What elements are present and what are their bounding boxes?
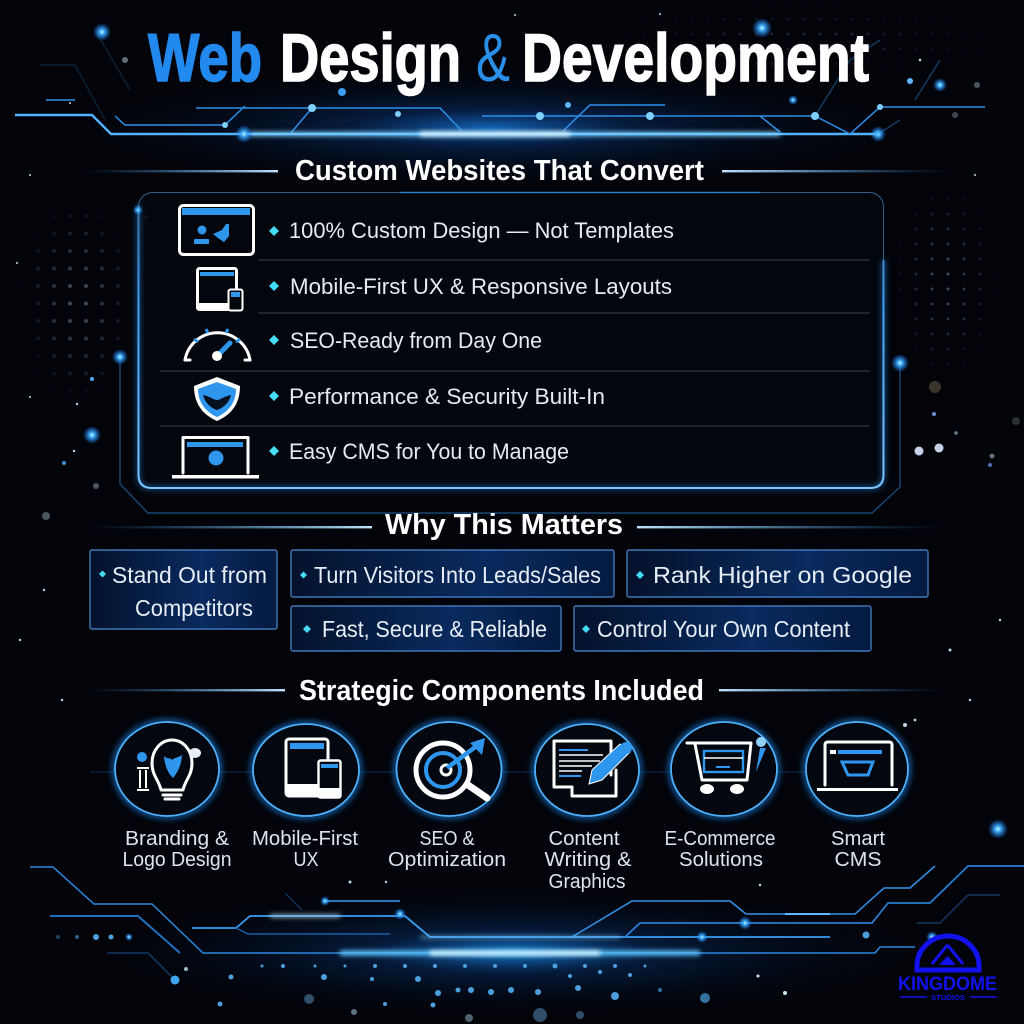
benefit: ranking	[627, 550, 928, 597]
icon: browser window	[180, 206, 254, 254]
title: &	[476, 20, 510, 96]
component: mobile first: Mobile-First	[252, 828, 358, 850]
heading: why this matters: Why This Matters	[385, 509, 623, 541]
component: e-commerce: Solutions	[679, 849, 763, 871]
icon: speed gauge	[185, 329, 250, 361]
feature list	[269, 218, 674, 464]
component: e-commerce: E-Commerce	[664, 828, 776, 850]
component: SEO: Optimization	[388, 849, 506, 871]
component: content writing: Writing &	[544, 849, 632, 871]
feature list: 100% Custom Design — Not Templates	[289, 218, 674, 243]
heading: strategic components: Strategic Components Included	[299, 675, 704, 707]
benefit: ranking: Rank Higher on Google	[653, 562, 912, 588]
bottom particles	[56, 896, 938, 1022]
component: mobile first: UX	[294, 849, 318, 871]
logo: Kingdome Studios: KINGDOME	[898, 974, 997, 995]
component: smart CMS: CMS	[834, 849, 882, 871]
feature list: Mobile-First UX & Responsive Layouts	[290, 274, 672, 299]
bottom circuit lines	[30, 866, 1024, 980]
component: branding: Logo Design	[122, 849, 232, 871]
component: mobile first	[252, 723, 360, 871]
component: content writing: Graphics	[548, 871, 626, 893]
component: content writing	[534, 723, 640, 893]
component: SEO	[388, 721, 506, 871]
component: smart CMS: Smart	[831, 828, 885, 850]
title: Design	[280, 20, 461, 96]
benefit: stand out: Competitors	[135, 595, 253, 621]
panel: benefits	[90, 550, 928, 651]
heading: custom websites: Custom Websites That Convert	[295, 155, 704, 187]
icon: laptop with CMS	[172, 438, 259, 478]
component: branding	[114, 721, 232, 871]
title: Development	[522, 20, 869, 96]
title: Web	[148, 20, 262, 96]
benefit: stand out: Stand Out from	[112, 562, 267, 588]
icon: security shield	[194, 377, 240, 421]
benefit: content control	[574, 606, 871, 651]
logo: Kingdome Studios	[898, 936, 997, 1002]
component: branding: Branding &	[125, 828, 230, 850]
icon: tablet and phone	[197, 268, 242, 310]
benefit: leads	[291, 550, 614, 597]
component: smart CMS	[805, 721, 909, 871]
panel: features	[112, 192, 909, 513]
benefit: stand out	[90, 550, 277, 629]
logo: Kingdome Studios: STUDIOS	[931, 995, 965, 1002]
title	[148, 20, 869, 96]
benefit: reliable: Fast, Secure & Reliable	[322, 616, 547, 642]
component: SEO: SEO &	[420, 828, 475, 850]
connector between circles	[90, 771, 900, 773]
benefit: leads: Turn Visitors Into Leads/Sales	[314, 562, 601, 588]
component: e-commerce	[664, 721, 778, 871]
benefit: reliable	[291, 606, 561, 651]
component: content writing: Content	[548, 828, 620, 850]
feature list: Easy CMS for You to Manage	[289, 439, 569, 464]
benefit: content control: Control Your Own Content	[597, 616, 851, 642]
top circuit lines	[15, 30, 985, 143]
feature list: SEO-Ready from Day One	[290, 328, 542, 353]
feature list: Performance & Security Built-In	[289, 384, 605, 409]
